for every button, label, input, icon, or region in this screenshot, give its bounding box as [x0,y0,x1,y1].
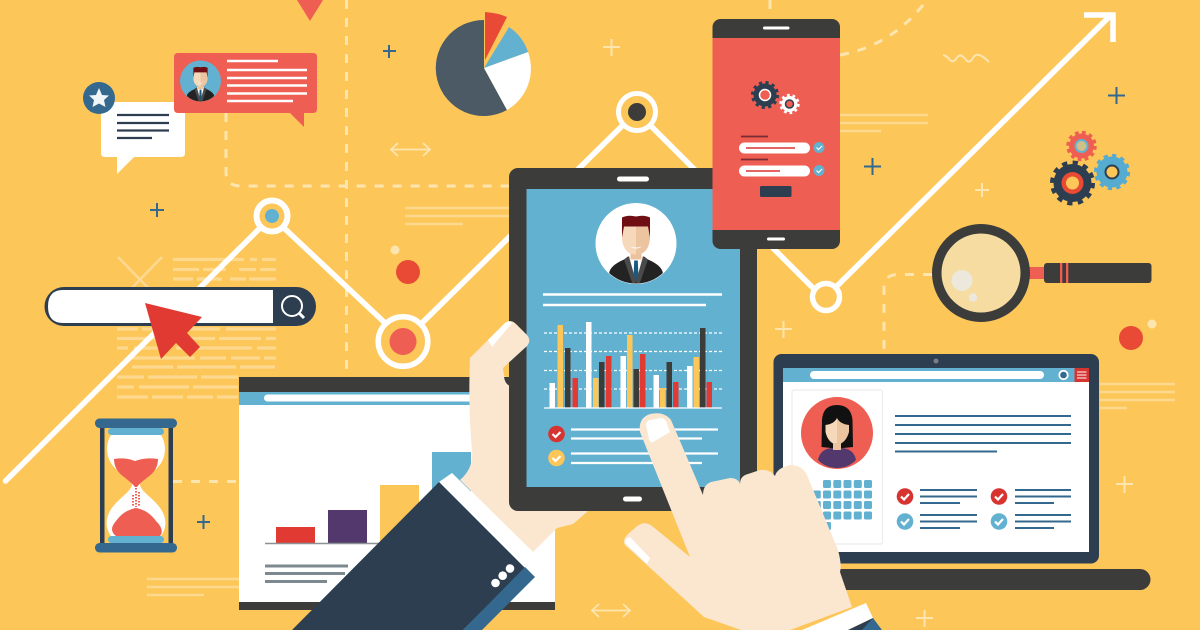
cuff buttons [491,564,514,587]
red chat bubble [174,53,317,127]
phone gears [752,82,798,113]
decorative dots [390,246,1156,350]
red marker triangle [297,0,323,21]
phone [712,19,840,249]
profile card [792,390,882,544]
trend node: red [378,317,428,366]
trend node: dark [618,94,656,130]
search bar [44,287,316,326]
check items [548,426,718,466]
bars [265,452,471,544]
tablet bar chart [544,322,722,408]
login form [739,136,824,197]
background dashed connectors [173,0,950,482]
plus signs dark [150,45,1125,529]
profile text lines [895,416,1071,452]
trend node: blue [256,200,288,232]
left thumb over tablet [470,321,529,380]
laptop [774,354,1150,590]
tablet [504,168,757,511]
right suit cuff [802,603,882,630]
search icon [282,296,304,318]
calendar grid [813,480,872,530]
browser window with bar chart [239,377,555,610]
thumbnail [625,537,650,564]
gear: blue [1096,156,1128,188]
star badge [83,82,115,114]
trend node: hollow [812,284,840,310]
rising trend line with arrow [6,15,1113,481]
wavy mark [943,55,989,62]
avatar: woman [801,397,873,469]
double arrows [391,143,630,617]
magnifying glass [932,224,1152,322]
left suit sleeve [292,473,535,630]
caption lines [265,566,348,582]
settings icon [1059,371,1068,379]
avatar: man small [180,60,221,104]
hourglass [95,418,177,552]
left hand palm [460,322,590,552]
heading lines [543,294,722,305]
gear: navy [1052,162,1093,204]
background text lines [147,115,1175,595]
menu icon [1074,368,1089,382]
laptop checklist [897,488,1071,530]
right hand pointing [624,413,852,630]
gear: red [1068,132,1095,160]
pie chart [436,12,531,116]
avatar: man large [596,203,676,288]
fingernail [646,418,670,442]
faint cross [118,257,162,300]
cursor arrow [145,303,202,359]
plus signs light [603,39,1133,627]
gears cluster [1052,132,1128,204]
white chat bubble [83,82,185,174]
